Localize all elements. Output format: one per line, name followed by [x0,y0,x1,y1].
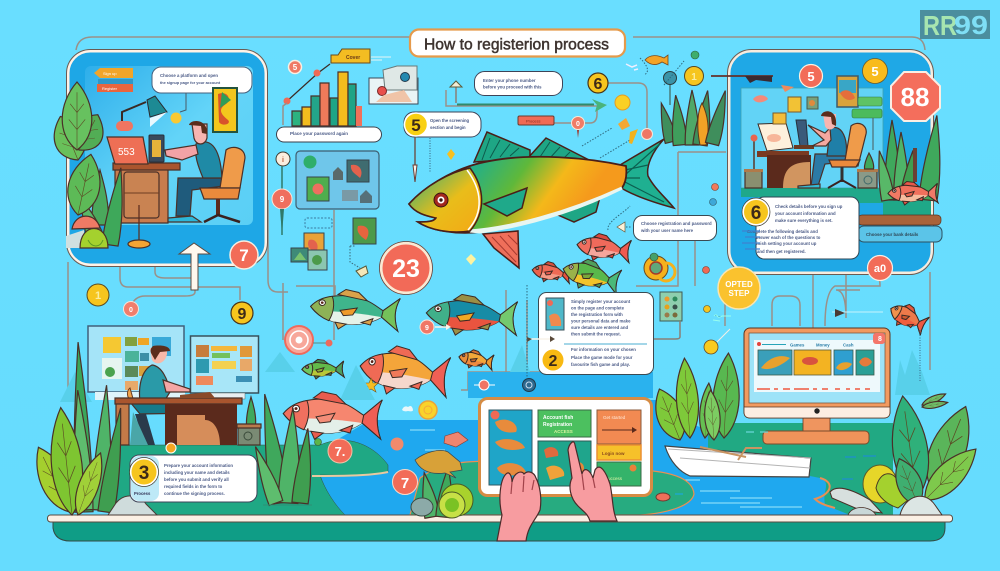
tablet [480,398,652,496]
callout: left panel [152,67,252,93]
fish: small green [302,359,344,379]
panel frame [68,51,266,265]
monitor: right: Cash [843,342,854,348]
callout: step 5: 5 [411,116,421,135]
marker: pink: 0 [129,307,133,314]
bar chart [283,64,362,126]
dotted trail [582,58,647,158]
callout: step 2: then submit the request. [571,332,621,336]
room floor [741,188,883,203]
gill [467,170,479,230]
monitor: right: Money [816,342,830,348]
step marker: 0 [576,121,580,128]
chart tag [331,49,391,63]
plant: lower right [885,391,985,509]
plant: beside monitor [647,352,741,445]
water [320,398,850,515]
envelope cards [369,66,418,104]
fish: large red [282,389,384,444]
callout: step 3: required fields in the form to [164,484,223,489]
small star [364,378,378,392]
frame [744,328,890,418]
callout: step 6 [742,197,859,259]
fish group: small upper right [531,231,632,297]
callout: step 2: sure details are entered and [571,325,628,330]
badge: 9 [231,302,253,324]
pebble [656,493,683,501]
callout: step 3 [130,455,257,502]
tags: Sign up [103,71,117,76]
callout: step 6: your account information and [775,211,836,216]
step marker: Process [526,118,540,124]
rocks and ball [411,484,473,518]
callout: step 3: Prepare your account information [164,463,233,468]
pins: top centre: 1 [691,72,697,83]
marker: pink [124,302,138,316]
head [409,168,482,232]
badge: 1 [87,284,109,306]
desk with laptop [107,135,180,248]
small photo cards [291,218,376,277]
panel: right workstation [711,50,946,280]
callout: step 3: including your name and details [164,470,230,475]
green ground: right [708,423,893,515]
plant: top centre [656,89,732,146]
fin rays [482,138,570,160]
person: left panel [165,121,224,222]
chart tag: Cover [346,55,360,61]
marker: red circle [288,60,302,74]
callout: step 2: 2 [549,353,558,370]
marker: dotted line and gauge [522,285,536,392]
marker: cloud [402,406,413,411]
callout: step 2: your personal data and make [571,318,631,324]
vertical pins: i [282,157,284,164]
tail [618,139,674,208]
badge: 9: 9 [238,306,247,323]
room [741,88,883,188]
ground dashes [746,432,876,479]
watermark: RR [923,10,957,41]
tags [94,68,133,92]
boat [665,446,811,477]
callout: step 5: section and begin [430,125,466,130]
callout: step 2: the registration form with [571,312,623,317]
callout: left panel: Choose a platform and open [160,73,218,78]
arrow: green right [450,81,607,112]
pins: top centre [664,51,704,105]
title: How to registerion process [424,36,609,54]
badge: opted step: STEP [729,289,750,298]
ground and water [115,398,893,515]
tablet: Login now [602,451,625,456]
plant: right panel [873,115,946,201]
rifle line [711,76,773,83]
badge: 7 water [392,470,418,494]
dot [166,443,176,453]
badge: 7: 7 [239,246,249,265]
small fish: orange top [626,55,668,70]
callout: step 6: Complete the following details and [747,229,818,234]
chin [744,407,890,418]
callout: step 5: Open the screening [430,118,470,123]
tail rays [625,144,664,202]
marker: yellow dot [615,95,630,110]
callout: step 6: and then get registered. [757,249,806,254]
arrow: up [179,243,210,290]
tablet island [410,461,694,515]
callout: step 3: before you submit and verify all [164,477,229,482]
banner [858,226,942,242]
callout: step 2 [538,292,654,374]
body [409,157,626,233]
badge: red: 5 [807,69,815,84]
marker: arrow from fish [420,320,451,334]
badge: 23: 23 [392,255,420,283]
card: teal [538,441,591,486]
sign: 88 [891,72,940,182]
desk with laptop: 553 [118,147,135,158]
platform [48,515,952,541]
monitor: right: 8 [878,336,882,343]
sign: 88: 88 [901,82,929,112]
chart caption pill: Place your password again [290,131,348,136]
marker: arrow from fish: 9 [425,325,429,332]
dots right mid [702,184,718,274]
plant: center grass [249,393,316,505]
callout: step 3: 3 [139,463,149,484]
callout: step 3: Process [134,491,151,496]
fish: floating red [885,298,931,337]
monitor: right [744,328,890,444]
fish: small orange [457,347,495,372]
desk and board [757,120,814,188]
monitor: right: Games [790,342,805,348]
badge: yellow O [419,401,437,419]
rocks lower right [830,465,908,515]
chair [200,147,245,222]
callout: step 6: 6 [751,203,761,224]
chart caption pill [276,127,382,142]
tablet: Account fish [543,415,573,421]
panel outline [728,50,934,274]
big fish [409,132,674,268]
vertical pins [272,152,292,235]
lamp [116,93,186,131]
callout: step 2: favourite fish game and play. [571,362,630,367]
person: lower left at desk [127,346,205,445]
callout: top centre: Enter your phone number [483,78,536,83]
callout: step 6: finish setting your account up [755,241,817,246]
dorsal fins [474,132,530,162]
screen [749,333,885,403]
badge: 6 [588,73,608,93]
dot [314,438,322,446]
fish: orange [357,341,452,402]
watermark [920,10,990,41]
pectoral fin [484,188,527,216]
callout: right of fish: with your user name here [640,228,694,233]
card: game icons [660,292,682,321]
tags: Register [102,86,118,91]
callout: step 2: For information on your chosen [571,347,636,352]
upper water band [468,372,653,398]
badge: a0: a0 [874,263,886,275]
belly [470,188,622,232]
hand: left [497,472,541,541]
card: yellow [597,445,641,460]
callout: step 2: on the page and complete [571,306,625,310]
tablet: Registration [543,422,572,428]
badge: target [285,326,332,354]
stand [803,418,830,431]
card: orange [597,410,641,444]
callout: left panel: the signup page for your account [160,81,221,85]
monitor: lower left B [190,336,258,399]
title [410,30,625,56]
water ripples [410,430,802,507]
vertical pins: 9 [280,195,285,204]
badge: 7 [230,241,258,269]
wood shelf [858,215,941,225]
badge: 6: 6 [594,76,603,93]
fish: red in panel [888,181,938,205]
connector lines [68,37,930,398]
badge: red [800,64,822,88]
small badge: red partial [390,438,404,450]
fish: green [309,286,402,335]
person: right panel [798,111,848,188]
badge: yellow [862,58,888,84]
arrow: down from step 5 [413,137,430,182]
badge: 7 water: 7 [401,475,409,492]
shore line [312,472,388,476]
badge: opted step [718,267,760,309]
plant: left panel [46,82,129,248]
hand: right [568,442,617,521]
room backdrop [85,66,253,225]
callout: step 3: continue the signing process. [164,491,225,496]
watermark: 99 [954,10,988,40]
panel frame [729,51,932,273]
callout: step 2: Simply register your account [571,299,631,304]
box plant [237,397,261,445]
tablet: Success [605,476,623,481]
desk: lower left [115,392,242,445]
lower fin [558,197,600,222]
tablet: Get started [603,415,626,420]
eye [434,193,448,207]
small icons [447,118,638,265]
badge: 23 [380,242,432,294]
card: green lower [597,462,641,486]
ventral fin [483,231,519,268]
small marker icons [704,306,883,354]
badge: a0 [868,256,892,280]
badge: gold ring icon [644,253,675,281]
tablet: ACCESS [554,429,573,434]
fish: teal [425,292,519,339]
callout: right of fish [608,206,716,240]
badge: 1: 1 [95,290,101,302]
banner: Choose your bank details [866,232,919,237]
callout: step 6: make sure everything is set. [775,218,833,223]
green ground: left [115,440,388,515]
panel: app screen [296,151,379,209]
marker: red cross [474,380,495,390]
planters [744,134,878,188]
rock [108,496,157,515]
step marker [518,116,584,138]
badge: 7 on hill: 7. [335,444,345,459]
wall art [753,76,882,150]
card: green [538,410,591,437]
marker: red circle: 5 [293,63,298,72]
callout: step 6: Check details before you sign up [775,204,843,209]
callout: step 2: Place the game mode for your [571,355,633,360]
callout: top centre [474,72,562,96]
panel outline [66,50,268,266]
card: left [489,410,532,485]
rock front right [900,496,942,515]
callout: step 6: answer each of the questions to [755,235,821,240]
callout: step 5 [404,112,481,137]
plant: lower left [26,342,129,518]
badge: opted step: OPTED [725,280,753,289]
background hills [60,345,930,402]
panel: left workstation [46,50,268,290]
badge: yellow: 5 [871,64,879,79]
chair: right panel [828,123,866,188]
marker: pink dot [642,128,652,140]
picture [213,88,237,132]
monitor: lower left A [88,326,185,400]
badge: 7 on hill [328,439,352,463]
arrow: to step 2 [527,336,555,342]
rocks [66,216,108,248]
callout: top centre: before you proceed with this [483,84,542,90]
plant + fish in water [415,432,468,518]
callout: right of fish: Choose registration and password [641,221,712,226]
